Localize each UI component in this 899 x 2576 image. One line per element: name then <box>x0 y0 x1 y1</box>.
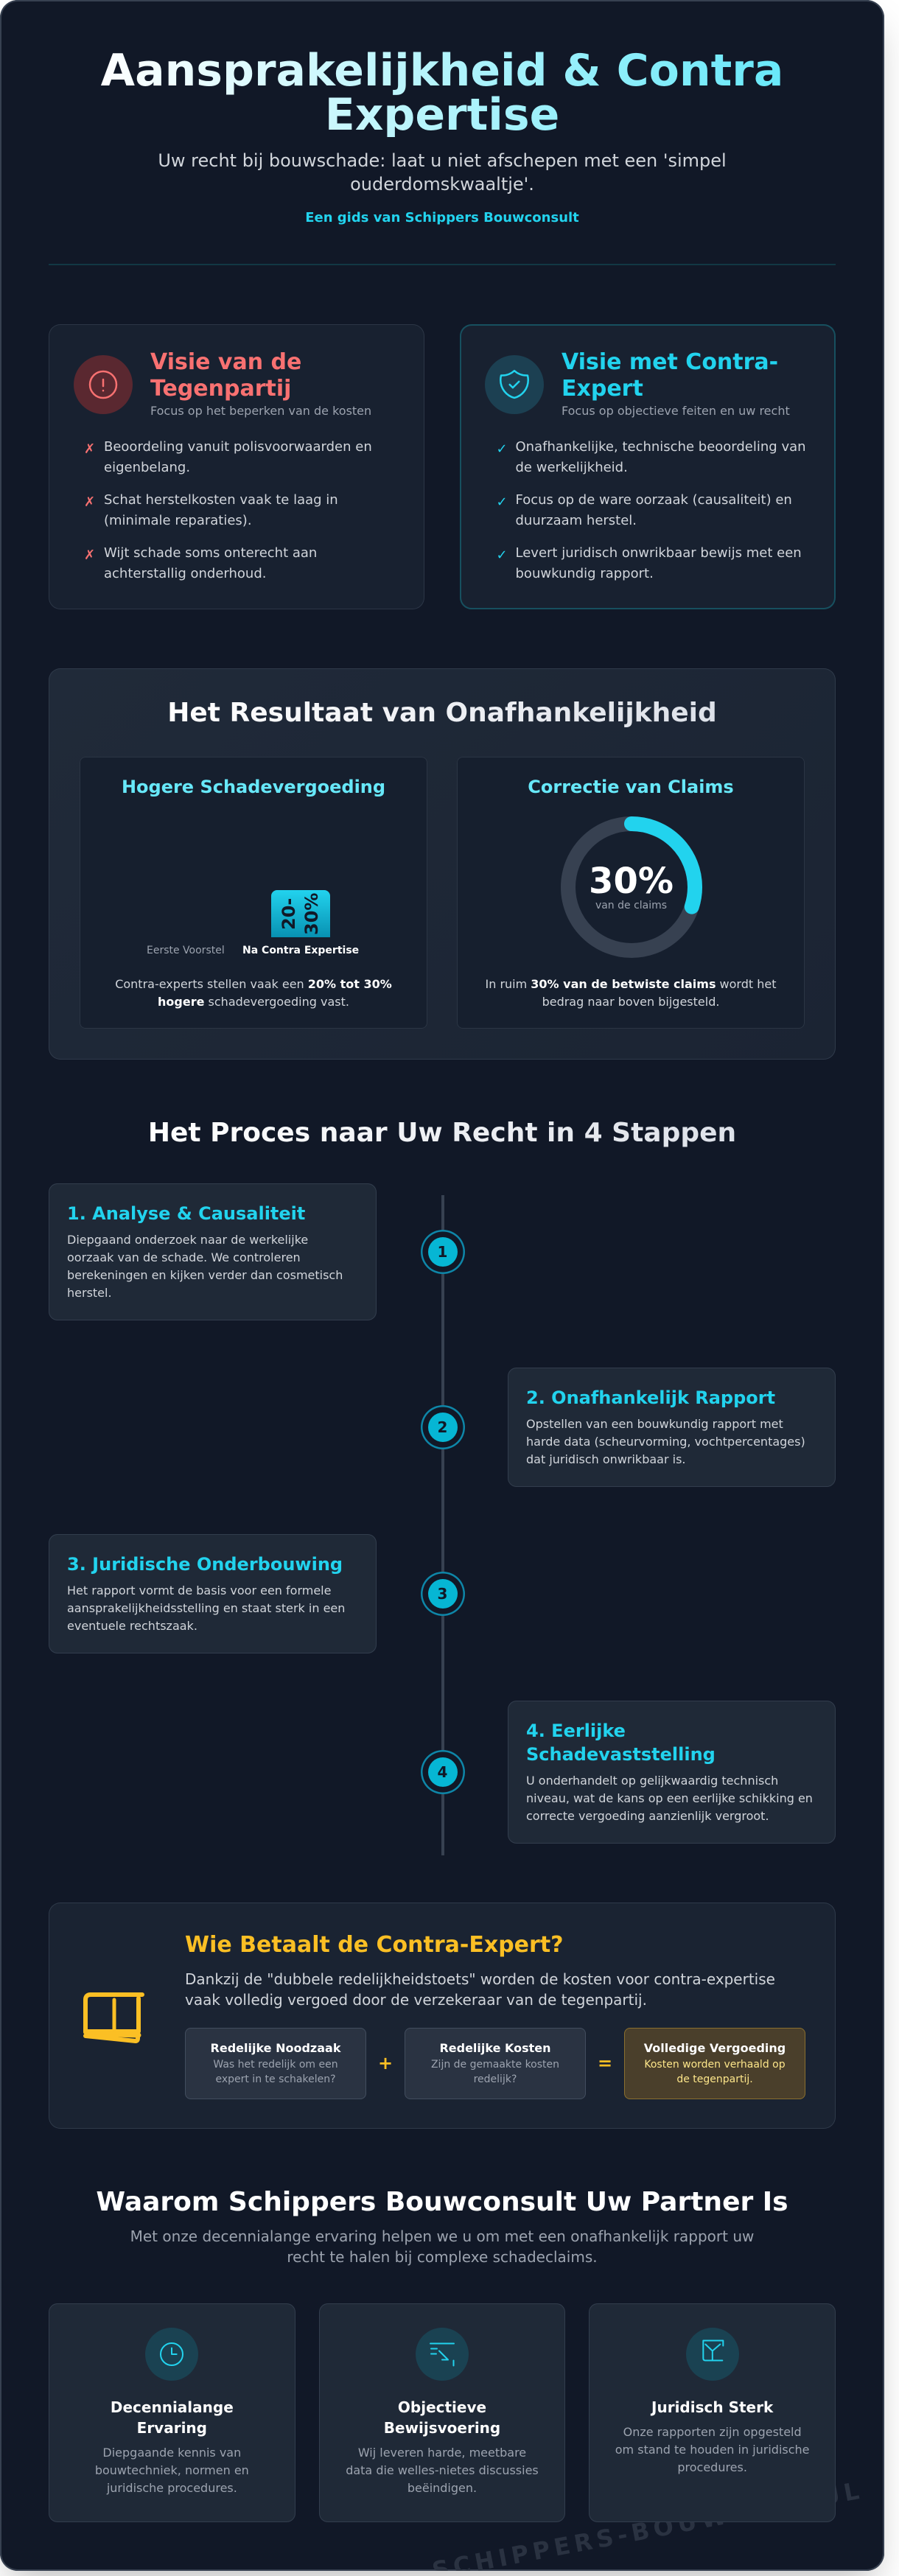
title: Aansprakelijkheid & Contra <box>101 45 783 97</box>
label: na contra expertise: Na Contra Expertise <box>242 945 359 956</box>
text: dubbele redelijkheidstoets: Dankzij de "dubbele redelijkheidstoets" worden de kosten voor contra-expertise <box>185 1970 775 1988</box>
list: contra-expert points: bouwkundig rapport. <box>516 566 654 581</box>
step 2 marker: 2 <box>438 1418 447 1436</box>
step 4 card <box>508 1701 836 1844</box>
intro text: recht te halen bij complexe schadeclaims. <box>287 2248 598 2266</box>
formula box: redelijke kosten: Redelijke Kosten <box>439 2041 551 2055</box>
title: Expertise <box>325 89 559 141</box>
heading: tegenpartij: Visie van de <box>150 349 301 374</box>
text <box>346 2446 539 2495</box>
step 4 card: U onderhandelt op gelijkwaardig technisch <box>526 1774 778 1788</box>
formula box: redelijke kosten: Zijn de gemaakte kosten <box>431 2059 559 2071</box>
text: om stand te houden in juridische <box>615 2442 810 2457</box>
icon: clock <box>145 2327 198 2380</box>
list: tegenpartij points: ✗ <box>84 441 95 457</box>
step 2 card: 2. Onafhankelijk Rapport <box>526 1387 775 1408</box>
donut chart: 30 percent: van de claims <box>595 900 667 911</box>
description: claims: In ruim 30% van de betwiste claims wordt het <box>485 977 777 991</box>
subtitle <box>158 150 727 195</box>
list: contra-expert points: duurzaam herstel. <box>516 513 637 528</box>
bar: na contra expertise: 20- <box>279 897 299 930</box>
text: bouwtechniek, normen en <box>95 2463 249 2477</box>
step 3 card: 3. Juridische Onderbouwing <box>67 1554 343 1575</box>
description: claims <box>485 977 777 1009</box>
step 4 card: niveau, wat de kans op een eerlijke schikking en <box>526 1791 813 1805</box>
list: tegenpartij points: achterstallig onderhoud. <box>104 566 266 581</box>
label: eerste voorstel: Eerste Voorstel <box>147 945 225 956</box>
donut chart: 30 percent: 30% <box>589 861 674 902</box>
icon: alert circle <box>74 355 133 414</box>
list: tegenpartij points: eigenbelang. <box>104 460 190 475</box>
subtitle: ouderdomskwaaltje'. <box>350 174 534 195</box>
title: Decennialange <box>111 2398 234 2416</box>
step 4 card: correcte vergoeding aanzienlijk vergroot. <box>526 1809 769 1823</box>
list: tegenpartij points: (minimale reparaties). <box>104 513 252 528</box>
list: contra-expert points: ✓ <box>497 441 508 457</box>
step 2 card: Opstellen van een bouwkundig rapport met <box>526 1417 783 1431</box>
step 4 marker: 4 <box>438 1763 447 1781</box>
step 1 marker: 1 <box>438 1243 447 1261</box>
text <box>95 2446 249 2495</box>
formula box: volledige vergoeding <box>624 2028 805 2099</box>
tagline: Een gids van Schippers Bouwconsult <box>305 210 579 225</box>
step 4 marker <box>420 1750 464 1794</box>
list: contra-expert points: ✓ <box>497 494 508 510</box>
panel: visie met contra-expert <box>460 324 836 609</box>
step 3 marker <box>420 1572 464 1616</box>
panel: visie van de tegenpartij <box>49 324 424 609</box>
list: contra-expert points: Levert juridisch onwrikbaar bewijs met een <box>516 545 802 561</box>
step 2 card: dat juridisch onwrikbaar is. <box>526 1452 685 1466</box>
operator: plus: + <box>378 2053 393 2073</box>
subtitle: Uw recht bij bouwschade: laat u niet afschepen met een 'simpel <box>158 150 727 171</box>
formula box: redelijke noodzaak <box>185 2028 366 2099</box>
intro text <box>130 2227 754 2266</box>
title: Ervaring <box>137 2419 207 2437</box>
text: beëindigen. <box>407 2481 477 2495</box>
text: Diepgaande kennis van <box>102 2446 241 2460</box>
step 3 card: aansprakelijkheidsstelling en staat sterk in een <box>67 1601 345 1615</box>
text: juridische procedures. <box>107 2481 237 2495</box>
text: data die welles-nietes discussies <box>346 2463 539 2477</box>
list: tegenpartij points: Schat herstelkosten vaak te laag in <box>104 492 338 508</box>
step 1 card: herstel. <box>67 1286 112 1300</box>
heading: contra-expert: Visie met Contra- <box>562 349 778 374</box>
panel: het resultaat <box>49 668 836 1060</box>
step 3 card: eventuele rechtszaak. <box>67 1619 197 1633</box>
card: decennialange ervaring <box>49 2303 295 2522</box>
intro text: Met onze decennialange ervaring helpen we u om met een onafhankelijk rapport uw <box>130 2227 754 2245</box>
description: schadevergoeding <box>115 977 392 1009</box>
description: schadevergoeding: hogere schadevergoeding vast. <box>158 995 349 1009</box>
list: tegenpartij points: Wijt schade soms onterecht aan <box>104 545 317 561</box>
donut chart: 30 percent <box>561 816 702 958</box>
title: Juridisch Sterk <box>651 2398 773 2416</box>
description: claims: bedrag naar boven bijgesteld. <box>542 995 719 1009</box>
list: tegenpartij points: ✗ <box>84 494 95 510</box>
text: procedures. <box>677 2460 747 2474</box>
icon: scale <box>83 1992 144 2043</box>
step 1 card: berekeningen en kijken verder dan cosmetisch <box>67 1268 343 1282</box>
step 1 card: Diepgaand onderzoek naar de werkelijke <box>67 1233 308 1247</box>
formula box: volledige vergoeding: de tegenpartij. <box>676 2073 753 2085</box>
panel: correctie van claims <box>457 757 805 1029</box>
step 2 marker <box>420 1405 464 1449</box>
title: Objectieve <box>398 2398 486 2416</box>
operator: equals: = <box>598 2053 612 2073</box>
step 3 card <box>49 1534 377 1653</box>
list: tegenpartij points: Beoordeling vanuit polisvoorwaarden en <box>104 439 372 455</box>
text: Onze rapporten zijn opgesteld <box>623 2424 802 2439</box>
formula box: redelijke kosten <box>405 2028 586 2099</box>
title: Bewijsvoering <box>384 2419 500 2437</box>
step 1 card <box>49 1183 377 1320</box>
text: Wij leveren harde, meetbare <box>358 2446 526 2460</box>
step 1 marker <box>420 1230 464 1274</box>
title <box>111 2398 234 2437</box>
step 3 card: Het rapport vormt de basis voor een formele <box>67 1583 331 1597</box>
bar: na contra expertise: 30% <box>301 892 321 935</box>
step 4 card: 4. Eerlijke <box>526 1721 626 1741</box>
step 2 card: harde data (scheurvorming, vochtpercentages) <box>526 1435 805 1449</box>
icon: legal <box>686 2327 739 2380</box>
heading: hogere schadevergoeding: Hogere Schadevergoeding <box>122 777 385 797</box>
formula box: redelijke noodzaak: Was het redelijk om een <box>213 2059 338 2071</box>
panel: hogere schadevergoeding <box>80 757 427 1029</box>
list: contra-expert points: Onafhankelijke, technische beoordeling van <box>516 439 806 455</box>
formula box: redelijke kosten: redelijk? <box>474 2073 517 2085</box>
panel: wie betaalt <box>49 1903 836 2129</box>
heading: tegenpartij: Focus op het beperken van de kosten <box>150 404 371 417</box>
heading: contra-expert <box>562 349 790 417</box>
text: dubbele redelijkheidstoets: vaak volledig vergoed door de verzekeraar van de tegenpartij. <box>185 1991 647 2009</box>
heading: tegenpartij: Tegenpartij <box>150 376 291 401</box>
text <box>615 2424 810 2474</box>
heading: contra-expert: Expert <box>562 376 643 401</box>
title <box>96 49 788 137</box>
list: tegenpartij points: ✗ <box>84 547 95 563</box>
list: contra-expert points: Focus op de ware oorzaak (causaliteit) en <box>516 492 792 508</box>
step 1 card: oorzaak van de schade. We controleren <box>67 1250 301 1264</box>
step 3 marker: 3 <box>438 1585 447 1603</box>
heading: wie betaalt: Wie Betaalt de Contra-Expert? <box>185 1932 564 1958</box>
list: tegenpartij points <box>84 439 372 581</box>
title <box>384 2398 500 2437</box>
bar: na contra expertise <box>271 890 330 937</box>
formula box: redelijke noodzaak: expert in te schakelen? <box>215 2073 336 2085</box>
text: dubbele redelijkheidstoets <box>185 1970 775 2009</box>
step 1 card: 1. Analyse & Causaliteit <box>67 1203 305 1224</box>
list: contra-expert points <box>497 439 806 581</box>
heading: contra-expert: Focus op objectieve feiten en uw recht <box>562 404 790 417</box>
formula box: redelijke noodzaak: Redelijke Noodzaak <box>211 2041 340 2055</box>
icon: shield check <box>485 355 544 414</box>
list: contra-expert points: ✓ <box>497 547 508 563</box>
formula box: volledige vergoeding: Volledige Vergoeding <box>644 2041 786 2055</box>
heading: tegenpartij <box>150 349 371 417</box>
step 2 card <box>508 1368 836 1487</box>
icon: data <box>416 2327 469 2380</box>
heading: waarom schippers: Waarom Schippers Bouwconsult Uw Partner Is <box>96 2187 788 2217</box>
heading: correctie van claims: Correctie van Claims <box>528 777 734 797</box>
step 4 card: Schadevaststelling <box>526 1744 716 1765</box>
heading: proces: Het Proces naar Uw Recht in 4 Stappen <box>148 1117 736 1148</box>
list: contra-expert points: de werkelijkheid. <box>516 460 628 475</box>
card: juridisch sterk <box>589 2303 836 2522</box>
card: objectieve bewijsvoering <box>319 2303 565 2522</box>
heading: resultaat: Het Resultaat van Onafhankelijkheid <box>167 698 717 728</box>
description: schadevergoeding: Contra-experts stellen vaak een 20% tot 30% <box>115 977 392 991</box>
formula box: volledige vergoeding: Kosten worden verhaald op <box>644 2059 786 2071</box>
